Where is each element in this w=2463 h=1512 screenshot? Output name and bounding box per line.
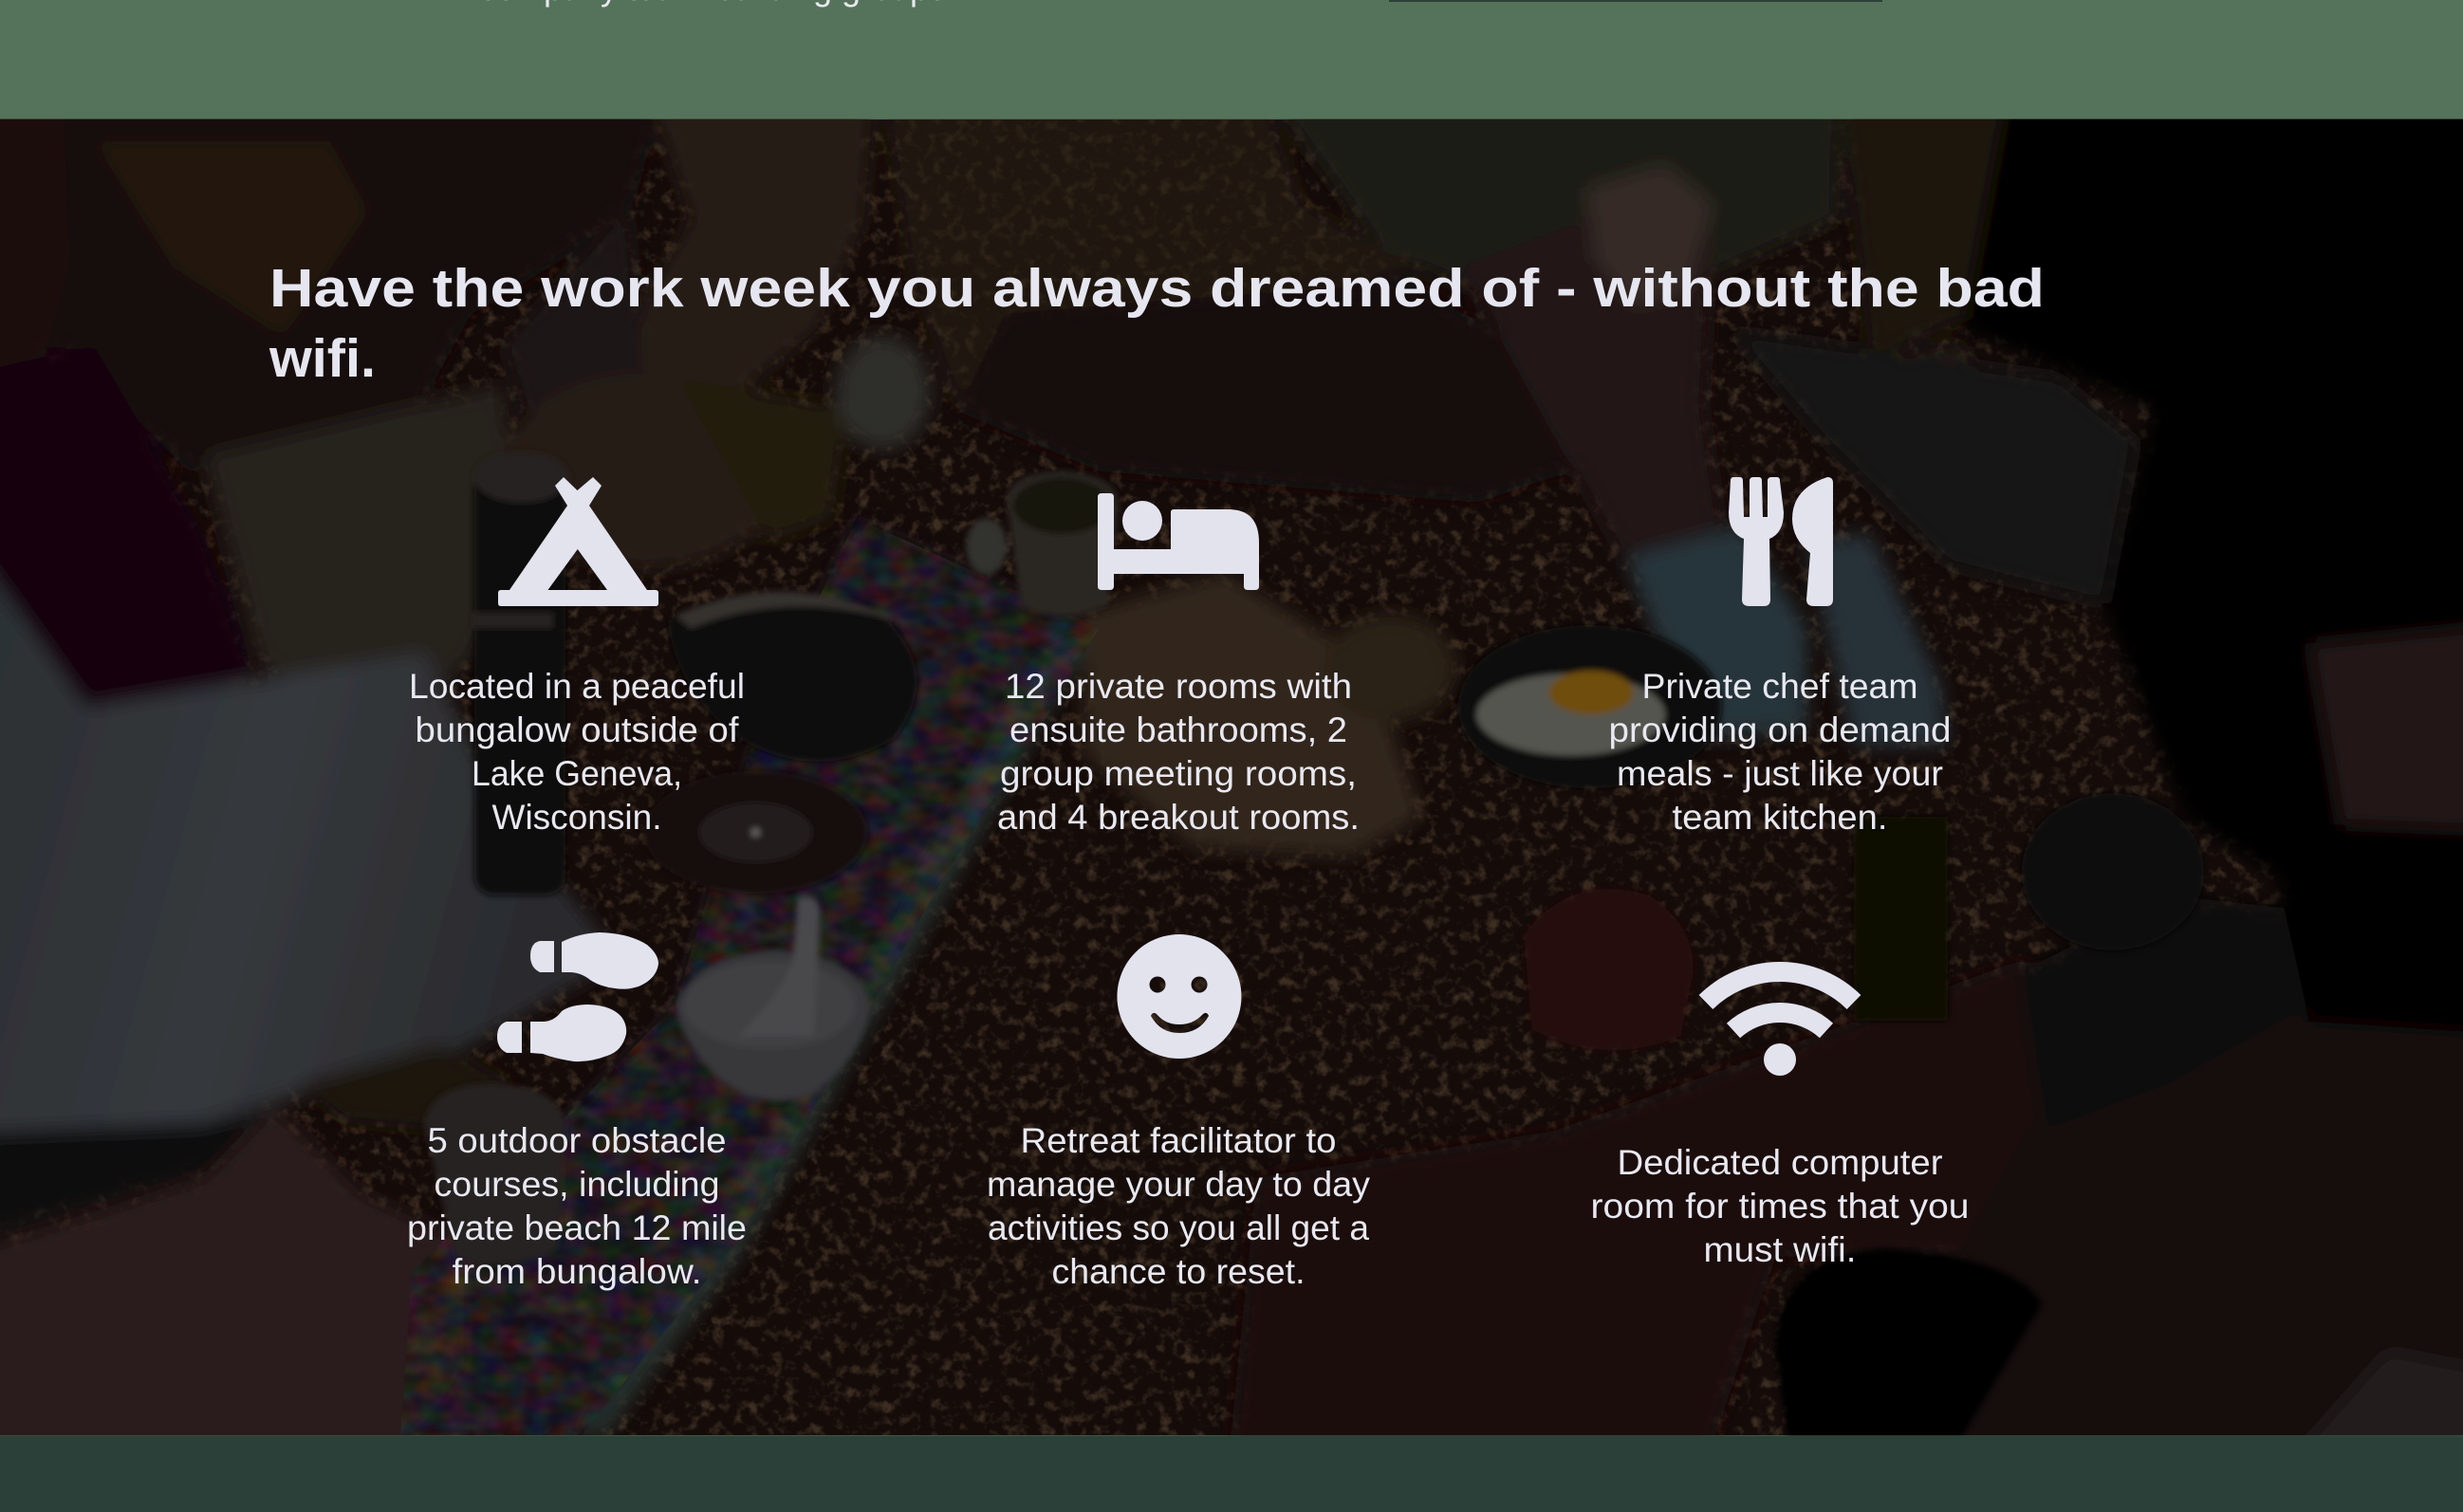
obstacle courses text: courses, including [435,1165,719,1204]
legs [1461,220,1728,565]
location text: Located in a peaceful [409,667,745,706]
rooms text: 12 private rooms with [1005,667,1352,706]
right background ground strip [1831,120,2016,355]
jacket [1271,120,1854,310]
heading: Have the work week you always dreamed of - without the bad [269,258,2045,319]
wifi text: Dedicated computer [1617,1143,1943,1182]
map [0,518,620,1134]
icon: footprints [497,932,658,1061]
dark shoe [668,597,917,762]
tarp [958,283,1571,503]
heading: wifi. [269,328,376,389]
obstacle courses text: private beach 12 mile [407,1208,747,1247]
chef text: Private chef team [1641,667,1918,706]
top green band [0,0,2463,120]
rooms text: and 4 breakout rooms. [997,798,1360,837]
location text: Wisconsin. [491,798,662,837]
facilitator text [987,1121,1370,1291]
footer band [0,1436,2463,1512]
feature: location [409,477,745,837]
helmet [2022,793,2204,950]
mug [1007,471,1119,617]
icon: wifi [1706,971,1854,1076]
spoon [738,897,820,1037]
obstacle courses text [407,1121,747,1291]
facilitator text: activities so you all get a [988,1208,1369,1247]
icon: fork and knife [1729,477,1833,606]
feature: obstacle courses [407,932,747,1291]
rooms text [997,667,1360,837]
wifi text: room for times that you [1590,1187,1970,1226]
rooms text: group meeting rooms, [1000,754,1357,793]
thermos [474,471,565,895]
left dark body and red fabric [0,343,68,368]
bottom right red [1854,989,2463,1492]
paper bag [1083,573,1421,856]
stand shadow [1854,817,1948,1021]
icon: bed [1098,493,1259,590]
shoes [1626,526,1806,738]
facilitator text: Retreat facilitator to [1021,1121,1336,1160]
rug base [400,518,1100,1435]
clipped dark button edge [1389,0,1882,2]
location text: bungalow outside of [416,710,739,749]
arm skin [635,120,890,399]
shorts [204,385,518,738]
hand lower right top [2309,620,2463,832]
facilitator text: manage your day to day [987,1165,1370,1204]
top center ground [880,79,1414,408]
feature: facilitator [987,934,1370,1291]
chef text: meals - just like your [1617,754,1943,793]
top left jacket [0,79,668,471]
feature: rooms [997,493,1360,837]
grey bowl [676,950,870,1100]
chef text: providing on demand [1609,710,1951,749]
chef text [1609,667,1951,837]
feature: wifi [1590,971,1970,1269]
lower left skin [0,1107,463,1492]
white corner [2262,1351,2463,1492]
feature: chef [1609,477,1951,837]
glove [2019,895,2309,1131]
bottom dark pot [1775,1248,2042,1461]
white shoe at top [836,336,930,450]
chef text: team kitchen. [1672,798,1888,837]
obstacle courses text: 5 outdoor obstacle [427,1121,727,1160]
heading [269,258,2045,389]
far right black [1964,79,2463,895]
wifi text [1590,1143,1970,1269]
rooms text: ensuite bathrooms, 2 [1009,710,1347,749]
cup lower left [424,1083,565,1264]
pan [1457,625,1722,788]
rug weave texture [393,503,1116,1445]
wifi text: must wifi. [1704,1230,1856,1269]
bottom right arm [1225,958,2058,1492]
facilitator text: chance to reset. [1051,1252,1306,1291]
obstacle courses text: from bungalow. [452,1252,702,1291]
icon: tent [498,477,658,606]
red gas canister [1524,889,1694,1050]
knee skin [507,380,769,568]
location text: Lake Geneva, [472,754,682,793]
hand [1586,165,1713,306]
black pot lid [644,771,867,894]
icon: smiley face [1117,934,1241,1059]
location text [409,667,745,837]
second hand [1895,326,1976,368]
tarp right [1728,330,2137,604]
eggs [1324,614,1456,721]
